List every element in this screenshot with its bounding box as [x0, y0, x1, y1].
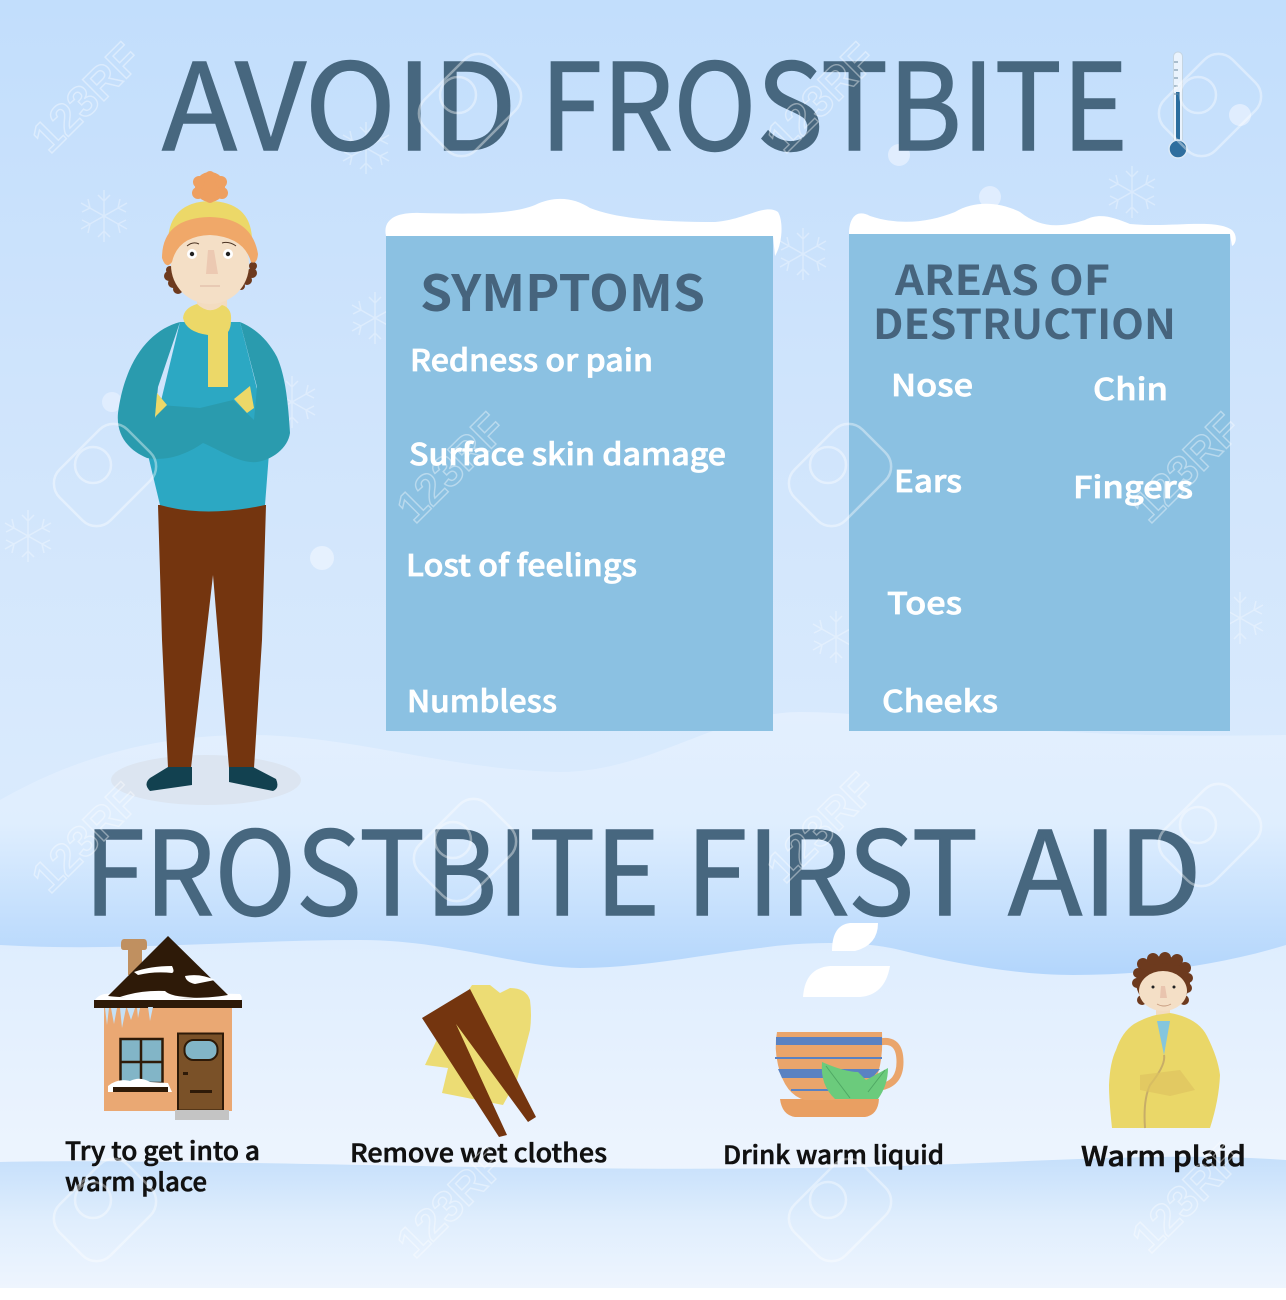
handle — [880, 1041, 900, 1087]
face details — [1152, 986, 1176, 1006]
cup stripes — [775, 1037, 882, 1091]
stock-photo watermarks: 123RF — [387, 1139, 515, 1267]
walls — [104, 1005, 232, 1111]
title: avoid frostbite: FROSTBITE — [540, 11, 1128, 185]
hat — [168, 201, 252, 240]
symptom list: Redness or pain — [410, 336, 653, 380]
stock-photo watermarks: 123RF — [1122, 404, 1250, 532]
brown trousers — [422, 989, 536, 1137]
face — [171, 226, 249, 304]
symptom list: Lost of feelings — [406, 541, 637, 585]
caption: warm place — [65, 1132, 260, 1199]
hair — [1132, 952, 1193, 1008]
roof snow — [120, 966, 215, 1000]
title: frostbite first aid: FROSTBITE — [84, 781, 660, 949]
roof eave — [94, 1000, 242, 1008]
panel heading: DESTRUCTION — [873, 291, 1176, 351]
gloves — [155, 393, 167, 417]
trousers — [158, 505, 266, 768]
door — [178, 1034, 223, 1110]
eave snow — [95, 992, 242, 1000]
icon: teacup with leaves — [775, 1032, 900, 1117]
icon: thermometer — [1169, 52, 1187, 158]
stock-photo watermarks: 123RF — [757, 34, 885, 162]
scarf — [183, 304, 231, 387]
caption: warm liquid: Drink warm liquid — [723, 1136, 944, 1172]
white bottom strip — [0, 1288, 1286, 1300]
icon: steam — [803, 923, 890, 997]
leaves — [822, 1062, 888, 1099]
body areas list: Cheeks — [882, 677, 998, 721]
stock-photo watermarks: 123RF — [22, 34, 150, 162]
panel: symptoms — [385, 199, 782, 731]
body areas list: Nose — [891, 361, 973, 405]
body areas list: Chin — [1093, 365, 1168, 409]
saucer — [780, 1099, 879, 1117]
caption: warm place: warm place — [65, 1163, 207, 1199]
icon: wet clothes — [422, 985, 536, 1137]
window — [120, 1039, 162, 1083]
panel heading: AREAS OF — [894, 247, 1110, 307]
stock-photo watermarks: 123RF — [1122, 1134, 1250, 1262]
icon: person in plaid — [1109, 952, 1220, 1128]
neck — [1156, 1005, 1170, 1021]
yellow sweater — [425, 985, 531, 1105]
face — [1139, 971, 1187, 1011]
body areas list — [882, 361, 1193, 721]
symptom list — [406, 336, 726, 721]
title: frostbite first aid — [84, 781, 1202, 949]
caption: warm plaid: Warm plaid — [1081, 1135, 1246, 1174]
title: frostbite first aid: AID — [1008, 781, 1202, 949]
panel snow cap — [849, 204, 1236, 246]
door step — [175, 1110, 229, 1120]
snow hill: lower — [0, 1157, 1286, 1288]
caption: wet clothes: Remove wet clothes — [350, 1134, 607, 1170]
background decorations: snowflakes and snow dots — [5, 104, 1263, 827]
panel: areas of destruction — [849, 204, 1236, 731]
stock-photo watermarks: 123RF — [387, 404, 515, 532]
cup — [776, 1032, 882, 1100]
symptom list: Numbless — [407, 677, 557, 721]
body areas list: Toes — [887, 579, 962, 623]
eyes and nose — [187, 242, 236, 286]
shoes — [146, 767, 192, 791]
title: frostbite first aid: FIRST — [686, 781, 978, 949]
sweater body — [148, 322, 270, 512]
stock-photo watermarks: 123RF — [757, 764, 885, 892]
chimney — [121, 939, 147, 975]
stock-photo watermarks: 123RF — [22, 774, 150, 902]
hair — [164, 262, 257, 294]
panel heading: SYMPTOMS — [420, 254, 705, 326]
plaid blanket — [1109, 1013, 1220, 1128]
caption: warm place: Try to get into a — [65, 1132, 260, 1168]
panel body — [386, 236, 773, 731]
sweater sleeves — [118, 322, 290, 462]
body areas list: Ears — [894, 457, 962, 501]
panel snow cap — [385, 199, 782, 256]
roof — [108, 936, 228, 998]
pompom — [192, 171, 228, 203]
window sill with snow — [108, 1079, 172, 1092]
title: avoid frostbite — [162, 11, 1128, 185]
icicles — [105, 1007, 153, 1028]
symptom list: Surface skin damage — [409, 430, 726, 474]
panel body — [849, 234, 1230, 731]
snow hill: upper — [0, 712, 1286, 990]
snow hill: middle — [0, 940, 1286, 1180]
ground shadow — [111, 755, 301, 805]
title: avoid frostbite: AVOID — [162, 11, 517, 185]
body areas list: Fingers — [1073, 463, 1193, 507]
neck — [197, 295, 227, 315]
icon: snowy house — [94, 936, 242, 1120]
character: man with crossed arms — [111, 171, 301, 805]
panel heading — [873, 247, 1176, 351]
